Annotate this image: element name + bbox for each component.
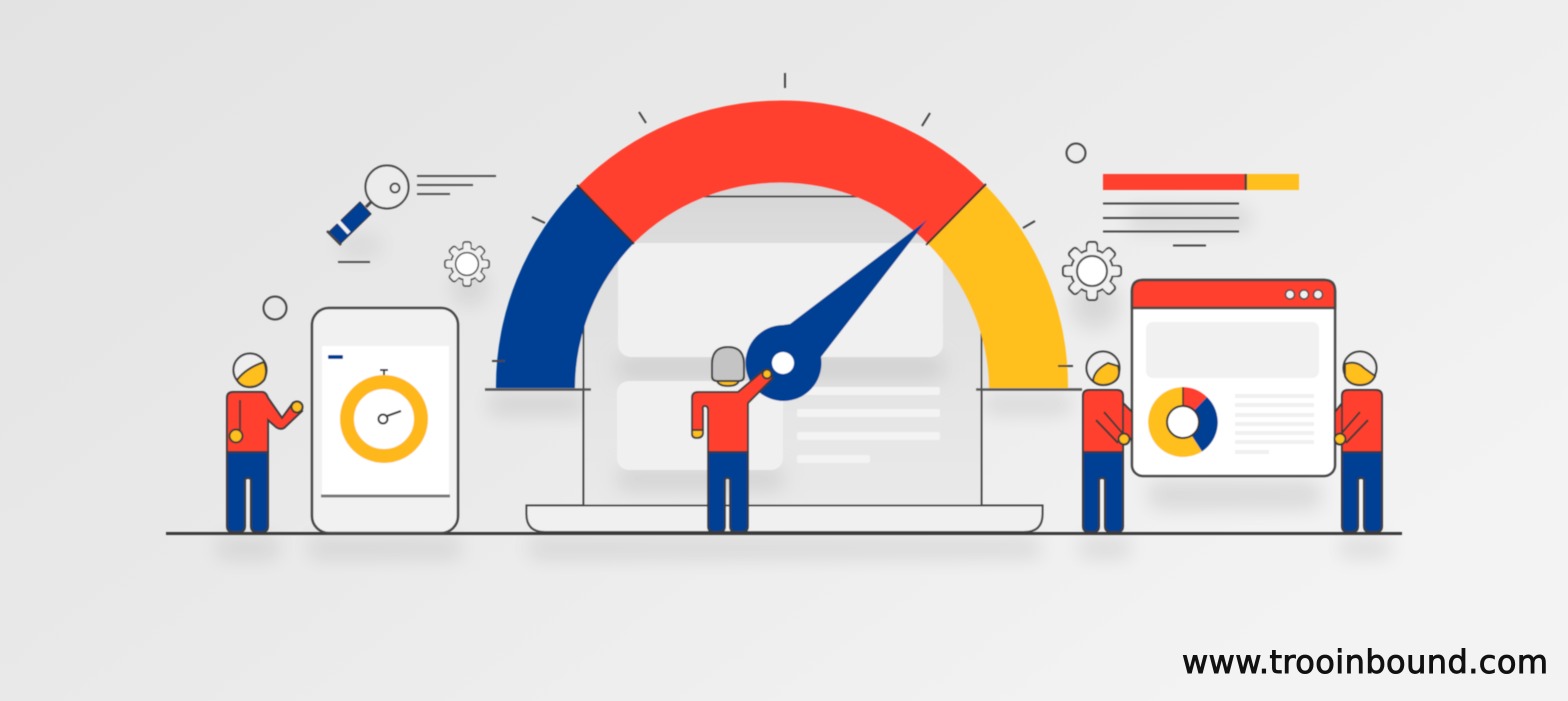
screen text lines bbox=[797, 387, 940, 463]
window buttons bbox=[1286, 290, 1322, 299]
stopwatch bbox=[347, 370, 421, 456]
legs bbox=[1342, 452, 1382, 532]
gauge needle bbox=[745, 220, 927, 401]
window content block bbox=[1146, 322, 1319, 378]
laptop screen top edge bbox=[696, 196, 868, 198]
torso and arms bbox=[692, 370, 773, 452]
gauge tick marks bbox=[492, 73, 1073, 366]
arm lines bbox=[1340, 412, 1368, 443]
raised hand bbox=[762, 370, 772, 378]
window body bbox=[1132, 280, 1335, 476]
soft shadows bbox=[218, 208, 1390, 558]
gauge segment: yellow bbox=[928, 186, 1068, 388]
gauge bbox=[485, 73, 1082, 390]
blue label bbox=[328, 355, 343, 359]
head bbox=[1344, 352, 1376, 384]
hand bbox=[1118, 434, 1130, 444]
gauge dividers bbox=[577, 184, 986, 245]
torso bbox=[1083, 390, 1123, 452]
laptop base bbox=[526, 506, 1042, 532]
laptop bbox=[526, 180, 1042, 532]
screen card: top bbox=[618, 243, 943, 357]
figure: person right of window bbox=[1334, 352, 1382, 532]
icon: small gear bbox=[445, 242, 489, 286]
phone with stopwatch bbox=[312, 308, 458, 533]
browser window bbox=[1132, 280, 1335, 476]
arm lines bbox=[1096, 412, 1124, 443]
head bbox=[1086, 352, 1120, 384]
illustration bbox=[166, 73, 1402, 558]
gauge segment: red bbox=[578, 100, 986, 244]
ground line bbox=[166, 532, 1402, 535]
hand bbox=[1334, 434, 1346, 444]
helmet head bbox=[712, 347, 744, 381]
gauge segment: blue bbox=[496, 186, 634, 388]
decorative circle: right bbox=[1066, 144, 1086, 162]
far arm bbox=[1335, 402, 1343, 440]
website url: www.trooinbound.com bbox=[1182, 643, 1548, 681]
hand on left bbox=[692, 430, 703, 438]
legs bbox=[227, 452, 268, 532]
laptop screen bbox=[574, 180, 990, 505]
laptop screen side edges bbox=[584, 322, 982, 505]
icon: magnifier bbox=[327, 166, 408, 245]
figure: center person legs bbox=[708, 452, 748, 532]
magnifier text lines bbox=[338, 176, 496, 262]
icon: large gear bbox=[1063, 242, 1121, 300]
inner arm line bbox=[239, 400, 241, 430]
torso bbox=[1342, 390, 1382, 452]
figure: left person bbox=[227, 354, 302, 532]
donut chart bbox=[1148, 387, 1218, 457]
legs bbox=[1083, 452, 1123, 532]
hands bbox=[230, 430, 242, 442]
figure: person left of window bbox=[1083, 352, 1132, 532]
phone body bbox=[312, 308, 458, 533]
torso and arm bbox=[227, 392, 302, 452]
face bbox=[717, 381, 739, 386]
chart legend lines bbox=[1235, 394, 1314, 454]
decorative circle: left bbox=[264, 296, 286, 320]
gauge base lines bbox=[485, 388, 1082, 391]
progress text lines bbox=[1103, 204, 1239, 246]
head bbox=[234, 354, 266, 386]
far arm bbox=[1122, 402, 1132, 440]
progress bar bbox=[1103, 174, 1299, 190]
screen card: bottom bbox=[617, 381, 783, 470]
phone screen bottom bar bbox=[321, 494, 450, 498]
window header bbox=[1132, 280, 1335, 308]
figure: center person upper body bbox=[692, 347, 773, 452]
phone screen bbox=[322, 346, 449, 496]
